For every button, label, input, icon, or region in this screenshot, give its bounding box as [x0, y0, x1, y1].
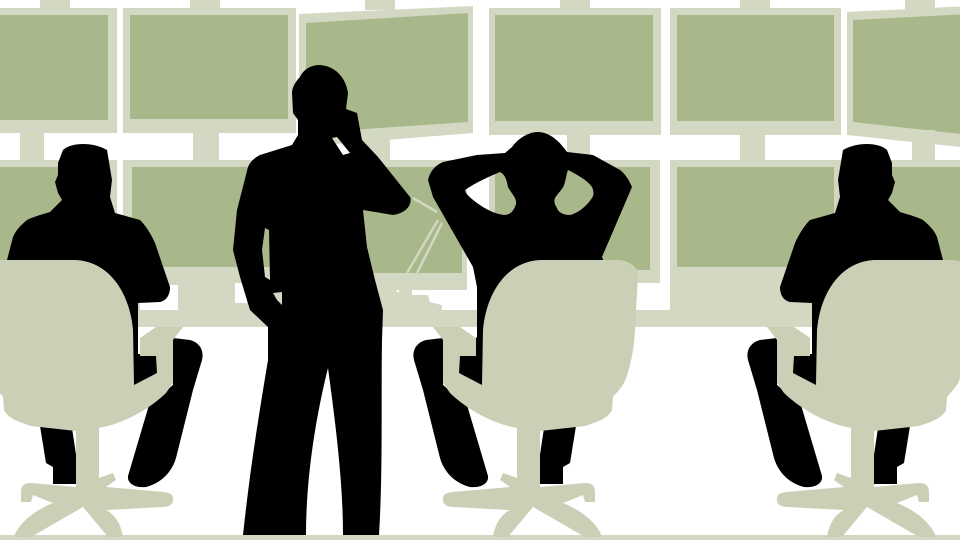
legs	[413, 338, 576, 487]
white notches in desk	[140, 283, 467, 310]
top stems	[40, 0, 935, 10]
chair	[0, 260, 183, 537]
stands	[20, 130, 935, 165]
chair	[767, 260, 960, 537]
monitor frames top row	[0, 6, 960, 148]
body	[7, 144, 170, 390]
operator centre: seated man with hands behind head	[413, 132, 638, 537]
desk band	[123, 285, 960, 327]
chair	[433, 260, 638, 537]
operator left: seated man seen from behind	[0, 144, 203, 537]
legs	[40, 338, 203, 487]
monitor frames bottom row	[0, 160, 960, 327]
body	[780, 144, 943, 390]
legs	[747, 338, 910, 487]
monitor screens top row	[0, 13, 960, 135]
monitor screens bottom row	[0, 167, 960, 273]
body with raised arms	[428, 132, 632, 390]
standing man on phone	[233, 65, 411, 535]
monitor light lines	[407, 198, 442, 273]
floor line	[0, 535, 960, 540]
operator right: seated man seen from behind	[747, 144, 960, 537]
